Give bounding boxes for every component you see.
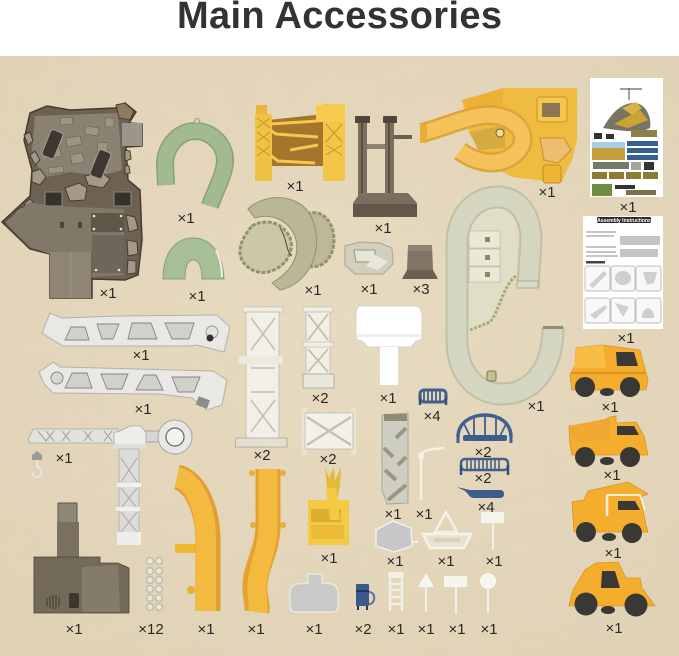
quantity label: ×1 (65, 621, 83, 638)
item: curved yellow tube (175, 477, 215, 638)
quantity label: ×3 (412, 281, 430, 298)
quantity label: ×1 (188, 288, 206, 305)
item: grey bottle piece (290, 574, 338, 638)
quantity label: ×1 (437, 553, 455, 570)
item: yellow excavator (308, 467, 349, 567)
item: blue arch bridge (458, 415, 511, 461)
item: white sign (481, 512, 504, 570)
quantity label: ×1 (379, 390, 397, 407)
item: white radar dish (356, 306, 422, 407)
quantity label: ×12 (138, 621, 164, 638)
item: rock half-tunnel (240, 198, 334, 299)
quantity label: ×1 (417, 621, 435, 638)
item: sticker sheet poster (590, 78, 663, 216)
item: yellow excavator truck (572, 482, 648, 562)
quantity label: ×1 (538, 184, 556, 201)
item: yellow dump truck (569, 416, 648, 484)
quantity label: ×1 (527, 398, 545, 415)
item: white street lamp (415, 448, 445, 523)
quantity label: ×1 (617, 330, 635, 347)
quantity label: ×4 (477, 499, 495, 516)
item: short white tower (303, 307, 334, 407)
item: rock mountain base (2, 103, 142, 302)
item: yellow loader truck (569, 562, 655, 637)
quantity label: ×4 (423, 408, 441, 425)
item: long blue fence (461, 459, 508, 487)
quantity label: ×1 (415, 506, 433, 523)
item: white basket (423, 512, 471, 570)
quantity label: ×1 (197, 621, 215, 638)
quantity label: ×1 (384, 506, 402, 523)
item: yellow mixer truck (570, 345, 648, 416)
quantity label: ×1 (485, 553, 503, 570)
item: yellow ramp tower (255, 104, 345, 195)
item: rectangle sign (444, 576, 467, 638)
item: round sign (480, 573, 498, 638)
quantity label: ×1 (604, 545, 622, 562)
quantity label: ×1 (304, 282, 322, 299)
item: blue bracket piece (457, 487, 504, 516)
quantity label: ×1 (247, 621, 265, 638)
item: tall white tower (235, 307, 287, 464)
item: brown pillars frame (353, 116, 417, 237)
item: twelve rings (138, 558, 164, 638)
item: yellow spiral slide base (420, 88, 577, 201)
item: assembly instructions sheet (583, 216, 663, 347)
item: brown power box (34, 503, 129, 638)
quantity label: ×2 (253, 447, 271, 464)
item: blue mug piece (354, 584, 374, 638)
item: horizontal white truss (302, 408, 356, 468)
quantity label: ×2 (311, 390, 329, 407)
quantity label: ×2 (474, 470, 492, 487)
item: grey spiral chute (382, 413, 408, 523)
quantity label: ×1 (360, 281, 378, 298)
item: small white rock piece (345, 242, 393, 298)
quantity label: ×1 (603, 467, 621, 484)
item: brown bracket stand (402, 245, 438, 298)
quantity label: ×1 (286, 178, 304, 195)
item: large green looped track (457, 197, 563, 415)
quantity label: ×1 (305, 621, 323, 638)
quantity label: ×1 (374, 220, 392, 237)
quantity label: ×1 (99, 285, 117, 302)
quantity label: ×1 (605, 620, 623, 637)
item: S-shaped yellow tube (247, 469, 286, 638)
item: white crane arm lower (39, 362, 227, 418)
quantity label: ×2 (319, 451, 337, 468)
quantity label: ×1 (387, 621, 405, 638)
quantity label: ×1 (320, 550, 338, 567)
quantity label: ×1 (448, 621, 466, 638)
item: white crane arm upper (42, 313, 230, 364)
item: triangle sign (417, 573, 435, 638)
quantity label: ×1 (134, 401, 152, 418)
item: small blue fence (420, 390, 446, 425)
quantity label: ×1 (601, 399, 619, 416)
quantity label: ×1 (619, 199, 637, 216)
quantity label: ×1 (480, 621, 498, 638)
item: green hook track (165, 118, 225, 227)
quantity label: ×2 (474, 444, 492, 461)
quantity label: ×1 (386, 553, 404, 570)
quantity label: ×2 (354, 621, 372, 638)
quantity label: ×1 (177, 210, 195, 227)
item: grey hexagon cup (376, 521, 418, 570)
item: assembly instructions sheet: Assembly Instructions (597, 218, 651, 224)
item: white tower crane (28, 420, 192, 545)
item: white ladder (387, 572, 405, 638)
quantity label: ×1 (132, 347, 150, 364)
quantity label: ×1 (55, 450, 73, 467)
item: small green arch (163, 238, 224, 305)
